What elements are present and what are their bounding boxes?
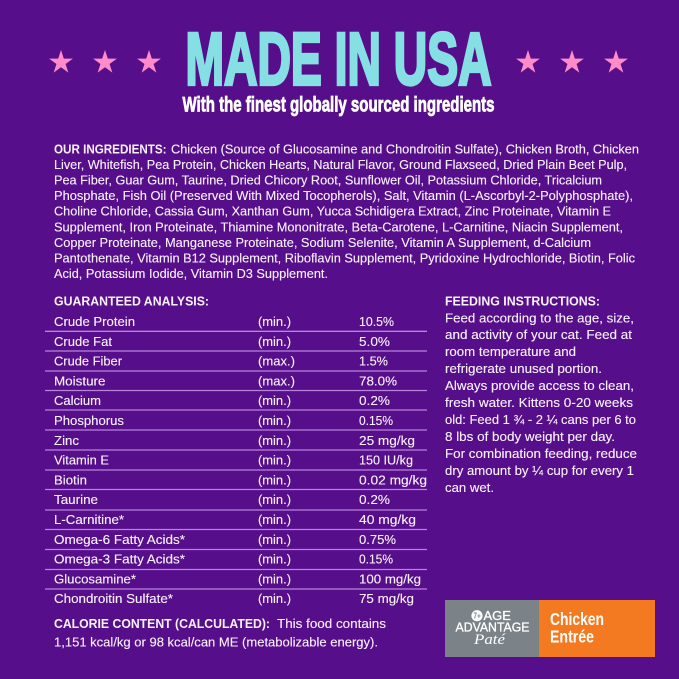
guaranteed analysis table: Chondroitin Sulfate* <box>54 591 173 606</box>
badge: age advantage pate: ADVANTAGE <box>456 621 530 635</box>
guaranteed analysis table: (min.) <box>258 334 291 349</box>
guaranteed analysis table: Crude Fiber <box>54 354 123 369</box>
guaranteed analysis table: (min.) <box>258 393 291 408</box>
feeding instructions: dry amount by ¼ cup for every 1 <box>445 463 634 478</box>
guaranteed analysis table: L-Carnitine* <box>54 512 124 527</box>
guaranteed analysis table: (min.) <box>258 314 291 329</box>
badge: chicken entree <box>539 600 655 657</box>
guaranteed analysis table: 150 IU/kg <box>359 453 413 468</box>
guaranteed analysis table: 78.0% <box>359 373 397 388</box>
guaranteed analysis table: Crude Fat <box>54 334 112 349</box>
calorie content: CALORIE CONTENT (CALCULATED): <box>54 616 270 631</box>
guaranteed analysis table: (min.) <box>258 552 291 567</box>
feeding instructions: FEEDING INSTRUCTIONS: <box>445 293 600 308</box>
feeding instructions <box>445 293 637 495</box>
guaranteed analysis table: 100 mg/kg <box>359 571 421 586</box>
guaranteed analysis table: (min.) <box>258 433 291 448</box>
guaranteed analysis heading: GUARANTEED ANALYSIS: <box>54 294 209 308</box>
guaranteed analysis table <box>45 314 427 606</box>
badge: age advantage pate: Paté <box>473 632 506 648</box>
ingredients text block: Supplement, Iron Proteinate, Thiamine Mononitrate, Beta-Carotene, L-Carnitine, Niacin Supplement, <box>54 219 623 234</box>
guaranteed analysis table: (min.) <box>258 532 291 547</box>
guaranteed analysis table: (max.) <box>258 373 295 388</box>
guaranteed analysis table: (max.) <box>258 354 295 369</box>
guaranteed analysis table: 1.5% <box>359 354 388 369</box>
ingredients text block: Pantothenate, Vitamin B12 Supplement, Riboflavin Supplement, Pyridoxine Hydrochloride, Biotin, Folic <box>54 250 635 266</box>
feeding instructions: For combination feeding, reduce <box>445 446 637 461</box>
badge: age advantage pate: 7+ <box>473 612 481 620</box>
guaranteed analysis table: (min.) <box>258 492 291 507</box>
feeding instructions: can wet. <box>445 480 494 495</box>
feeding instructions: room temperature and <box>445 344 576 359</box>
guaranteed analysis table: Vitamin E <box>54 453 109 468</box>
guaranteed analysis table: Zinc <box>54 433 80 448</box>
guaranteed analysis table: 10.5% <box>359 314 394 329</box>
feeding instructions: refrigerate unused portion. <box>445 361 602 376</box>
guaranteed analysis table: 75 mg/kg <box>359 591 414 606</box>
guaranteed analysis table: 0.2% <box>359 393 390 408</box>
badge: age advantage pate <box>445 600 539 657</box>
ingredients text block: Phosphate, Fish Oil (Preserved With Mixed Tocopherols), Salt, Vitamin (L-Ascorbyl-2-Polyphosphate), <box>54 188 633 203</box>
stars left <box>49 50 161 73</box>
ingredients text block: Liver, Whitefish, Pea Protein, Chicken Hearts, Natural Flavor, Ground Flaxseed, Dried Plain Beet Pulp, <box>54 157 627 172</box>
guaranteed analysis table: Moisture <box>54 373 106 388</box>
guaranteed analysis table: 5.0% <box>359 334 390 349</box>
ingredients text block: OUR INGREDIENTS: <box>54 141 166 156</box>
guaranteed analysis table: 0.75% <box>359 532 396 547</box>
stars right <box>516 50 628 73</box>
badge: age advantage pate: AGE <box>484 609 511 623</box>
feeding instructions: fresh water. Kittens 0-20 weeks <box>445 395 634 410</box>
calorie content <box>54 616 387 650</box>
guaranteed analysis table: 0.15% <box>359 552 393 567</box>
ingredients text block <box>54 141 639 281</box>
guaranteed analysis table: Taurine <box>54 492 98 507</box>
guaranteed analysis table: (min.) <box>258 472 291 487</box>
calorie content: 1,151 kcal/kg or 98 kcal/can ME (metabolizable energy). <box>54 635 378 650</box>
ingredients text block: Pea Fiber, Guar Gum, Taurine, Dried Chicory Root, Sunflower Oil, Potassium Chloride, Tricalcium <box>54 172 602 188</box>
ingredients text block: Chicken (Source of Glucosamine and Chondroitin Sulfate), Chicken Broth, Chicken <box>171 141 639 156</box>
feeding instructions: old: Feed 1 ¾ - 2 ¼ cans per 6 to <box>445 412 636 427</box>
guaranteed analysis table: (min.) <box>258 591 291 606</box>
feeding instructions: 8 lbs of body weight per day. <box>445 429 615 444</box>
feeding instructions: Feed according to the age, size, <box>445 310 634 325</box>
guaranteed analysis table: (min.) <box>258 413 291 428</box>
guaranteed analysis table: Omega-6 Fatty Acids* <box>54 532 185 547</box>
badge: chicken entree: Entrée <box>550 627 594 647</box>
guaranteed analysis table: 0.02 mg/kg <box>359 472 427 487</box>
guaranteed analysis table: Phosphorus <box>54 413 124 428</box>
guaranteed analysis table: Glucosamine* <box>54 571 136 586</box>
guaranteed analysis table: 25 mg/kg <box>359 433 415 448</box>
calorie content: This food contains <box>277 616 387 631</box>
ingredients text block: Copper Proteinate, Manganese Proteinate, Sodium Selenite, Vitamin A Supplement, d-Calcium <box>54 235 591 250</box>
ingredients text block: Choline Chloride, Cassia Gum, Xanthan Gum, Yucca Schidigera Extract, Zinc Proteinate, Vitamin E <box>54 204 611 219</box>
feeding instructions: and activity of your cat. Feed at <box>445 327 632 342</box>
guaranteed analysis table: Calcium <box>54 393 101 408</box>
guaranteed analysis table: 0.15% <box>359 413 393 428</box>
feeding instructions: Always provide access to clean, <box>445 378 634 393</box>
badge: chicken entree: Chicken <box>550 609 604 629</box>
guaranteed analysis table: (min.) <box>258 512 291 527</box>
guaranteed analysis table: 0.2% <box>359 492 390 507</box>
subtitle: With the finest globally sourced ingredients <box>182 92 495 116</box>
guaranteed analysis table: Omega-3 Fatty Acids* <box>54 552 185 567</box>
ingredients text block: Acid, Potassium Iodide, Vitamin D3 Supplement. <box>54 266 328 281</box>
guaranteed analysis table: 40 mg/kg <box>359 512 416 527</box>
guaranteed analysis table: Crude Protein <box>54 314 135 329</box>
title: MADE IN USA <box>186 18 492 100</box>
guaranteed analysis table: (min.) <box>258 571 291 586</box>
guaranteed analysis table: (min.) <box>258 453 291 468</box>
guaranteed analysis table: Biotin <box>54 472 87 487</box>
